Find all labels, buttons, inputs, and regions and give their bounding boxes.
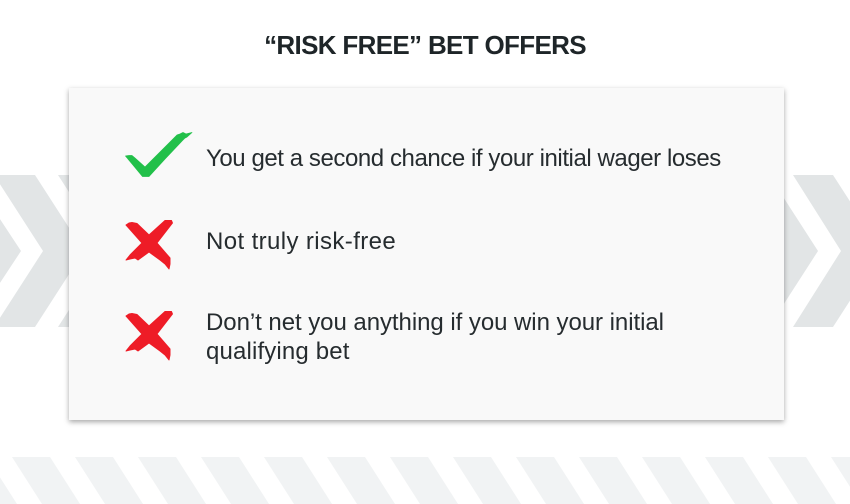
title: “RISK FREE” BET OFFERS: [264, 30, 586, 60]
icon: red cross 1: [126, 220, 173, 270]
icon: green check mark: [125, 132, 192, 177]
text: second chance benefit: You get a second chance if your initial wager loses: [206, 145, 721, 172]
text: no net on winning bet: [206, 309, 664, 365]
icon: red cross 2: [126, 311, 173, 360]
text: not truly risk-free: Not truly risk-free: [206, 228, 396, 255]
panel: offer pros and cons: [69, 88, 784, 420]
text: no net on winning bet: qualifying bet: [206, 338, 350, 365]
text: no net on winning bet: Don’t net you anything if you win your initial: [206, 309, 664, 336]
